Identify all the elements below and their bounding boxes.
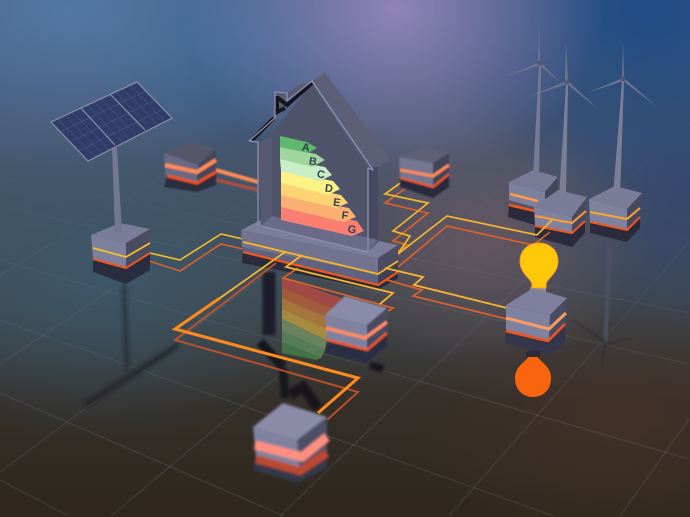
right wall [368,167,378,252]
wires to bulb [385,268,507,319]
wires to wind turbines [398,216,553,267]
energy rating chart [280,136,364,237]
band A: A [301,141,311,154]
wires from house base [175,252,393,420]
band D: D [324,182,334,195]
bulb reflection [515,351,551,397]
solar panel box [91,223,150,284]
house base [241,218,398,290]
panel cell grid [58,85,165,157]
bulb glass [520,243,558,288]
roof underside shadow [252,83,312,140]
band E: E [332,197,341,209]
house wireframe [249,73,390,252]
chimney [275,81,312,117]
front outline [249,81,373,252]
floor reflection: turbine poles [548,240,637,377]
band F: F [341,210,349,222]
floor reflection: energy label bars [282,277,347,360]
bulb socket [530,286,546,299]
band C: C [316,168,326,181]
floor grid [0,150,689,516]
wires to top-left box [205,167,258,190]
wind turbine 1 [505,25,561,177]
top-left box [164,142,216,192]
top-right box [399,147,449,198]
solar panel pole [112,148,122,232]
bottom foreground box [253,403,327,483]
wind turbine box 2 [534,190,587,247]
bulb box [505,288,567,355]
band B: B [308,155,318,168]
wires from solar panel [137,234,243,271]
wind turbine box 1 [508,170,558,225]
panel dividers [81,95,145,145]
solar panel array [51,82,172,161]
light bulb [520,243,558,299]
left wall [258,136,272,226]
house floor [261,216,378,252]
floor reflection: house silhouette [260,272,383,408]
floor reflection: solar panel shadow [85,285,178,405]
band G: G [347,223,357,237]
centre box [325,296,387,363]
wind turbine 3 [587,41,657,196]
wind turbine box 3 [589,186,642,242]
wires from top-right box [385,174,428,254]
wind turbine 2 [528,42,599,199]
house rear wall [312,73,390,170]
house inner panel [262,83,378,240]
